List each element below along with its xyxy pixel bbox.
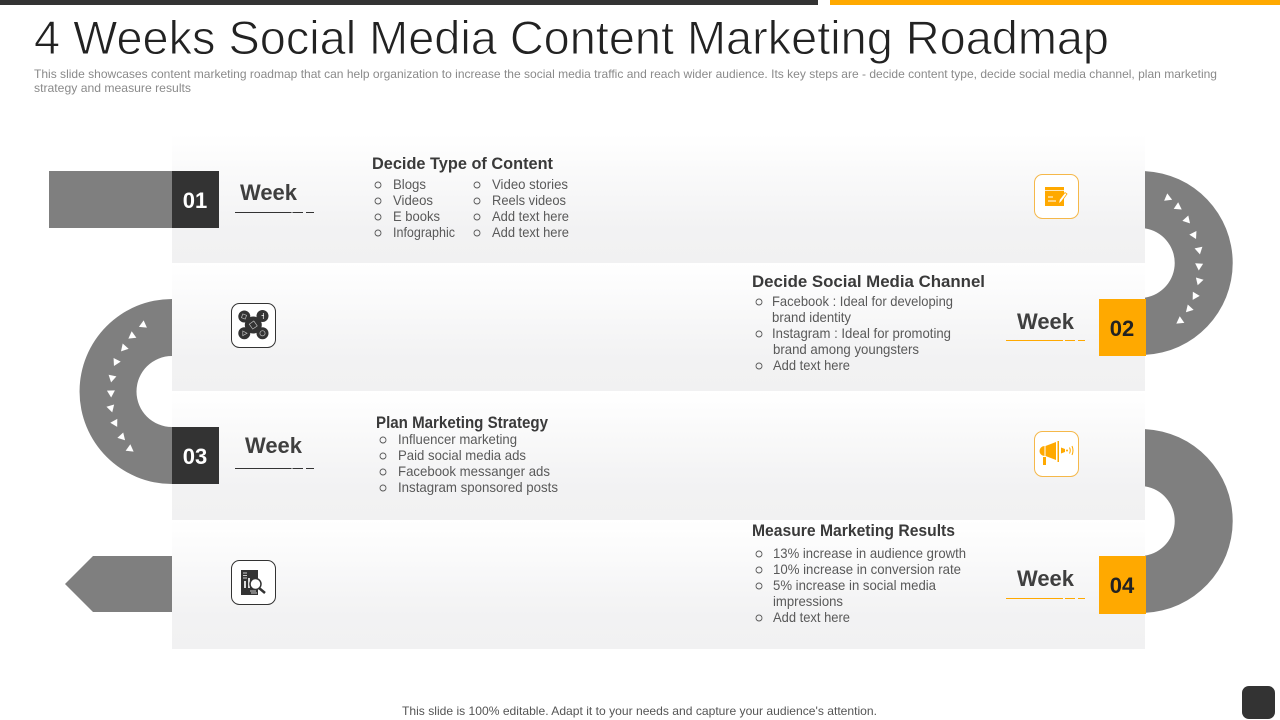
title: 4 Weeks Social Media Content Marketing Roadmap xyxy=(34,11,1109,64)
icon: social network xyxy=(232,304,276,348)
list: content types xyxy=(375,176,569,240)
heading: measure marketing results: Measure Marketing Results xyxy=(752,522,955,540)
heading: plan marketing strategy: Plan Marketing Strategy xyxy=(376,414,549,432)
list: content types: E books xyxy=(393,208,440,224)
number badge 02 xyxy=(1099,299,1146,356)
list: strategies: Influencer marketing xyxy=(398,431,517,447)
list: content types: Video stories xyxy=(492,176,568,192)
panel: week 04 xyxy=(172,520,1146,649)
footer note: This slide is 100% editable. Adapt it to your needs and capture your audience's attention. xyxy=(402,704,877,718)
list: results: 10% increase in conversion rate xyxy=(773,561,961,577)
list: strategies: Instagram sponsored posts xyxy=(398,479,558,495)
list: content types: Reels videos xyxy=(492,192,566,208)
number badge 01 xyxy=(172,171,219,228)
start bar xyxy=(49,171,172,228)
list: content types: Infographic xyxy=(393,224,455,240)
list: channels: Instagram : Ideal for promoting xyxy=(772,325,951,341)
number badge 04 xyxy=(1099,556,1146,614)
road curve: left xyxy=(80,299,172,484)
road curve: right bottom xyxy=(1145,429,1233,613)
number badge 03: 03 xyxy=(183,444,207,469)
panel: week 03 xyxy=(172,391,1145,520)
week label 04: Week xyxy=(1017,566,1075,591)
number badge 04: 04 xyxy=(1110,573,1135,598)
corner button xyxy=(1242,686,1275,719)
list: channels xyxy=(756,293,953,373)
icon: megaphone xyxy=(1034,432,1078,476)
top accent bars xyxy=(0,0,1280,5)
list: results xyxy=(756,545,966,625)
underline 01 xyxy=(235,212,314,214)
list: content types: Videos xyxy=(393,192,433,208)
list: results: 13% increase in audience growth xyxy=(773,545,966,561)
underline 02 xyxy=(1006,340,1085,342)
list: strategies xyxy=(380,431,558,495)
number badge 01: 01 xyxy=(183,188,207,213)
week label 02: Week xyxy=(1017,309,1075,334)
icon: content note and pencil xyxy=(1034,174,1078,218)
list: results: Add text here xyxy=(773,609,850,625)
description text xyxy=(34,67,1217,95)
direction arrows: left curve xyxy=(106,320,147,455)
number badge 03 xyxy=(172,427,219,484)
icon: report with magnifier xyxy=(232,560,276,604)
list: results: 5% increase in social media xyxy=(773,577,936,593)
week label 01: Week xyxy=(240,180,298,205)
list: strategies: Facebook messanger ads xyxy=(398,463,550,479)
underline 03 xyxy=(235,468,314,470)
description text: strategy and measure results xyxy=(34,81,191,95)
underline 04 xyxy=(1006,598,1085,600)
description text: This slide showcases content marketing roadmap that can help organization to increase the social media traffic and reach wider audience. Its key steps are - decide content type, decide social media channel, plan marketing xyxy=(34,67,1217,81)
direction arrows: right curve xyxy=(1164,193,1204,327)
panel: week 02 xyxy=(172,263,1146,391)
panel: week 01 xyxy=(172,134,1145,263)
week label 03: Week xyxy=(245,433,303,458)
list: channels: Facebook : Ideal for developing xyxy=(772,293,953,309)
road curve: right top xyxy=(1145,171,1233,355)
list: results: impressions xyxy=(773,593,843,609)
list: channels: brand identity xyxy=(772,309,851,325)
list: content types: Blogs xyxy=(393,176,426,192)
list: channels: Add text here xyxy=(773,357,850,373)
heading: decide type of content: Decide Type of Content xyxy=(372,155,553,173)
list: strategies: Paid social media ads xyxy=(398,447,526,463)
number badge 02: 02 xyxy=(1110,316,1134,341)
list: content types: Add text here xyxy=(492,224,569,240)
list: channels: brand among youngsters xyxy=(773,341,919,357)
list: content types: Add text here xyxy=(492,208,569,224)
end arrow xyxy=(65,556,172,612)
heading: decide social media channel: Decide Social Media Channel xyxy=(752,273,985,291)
